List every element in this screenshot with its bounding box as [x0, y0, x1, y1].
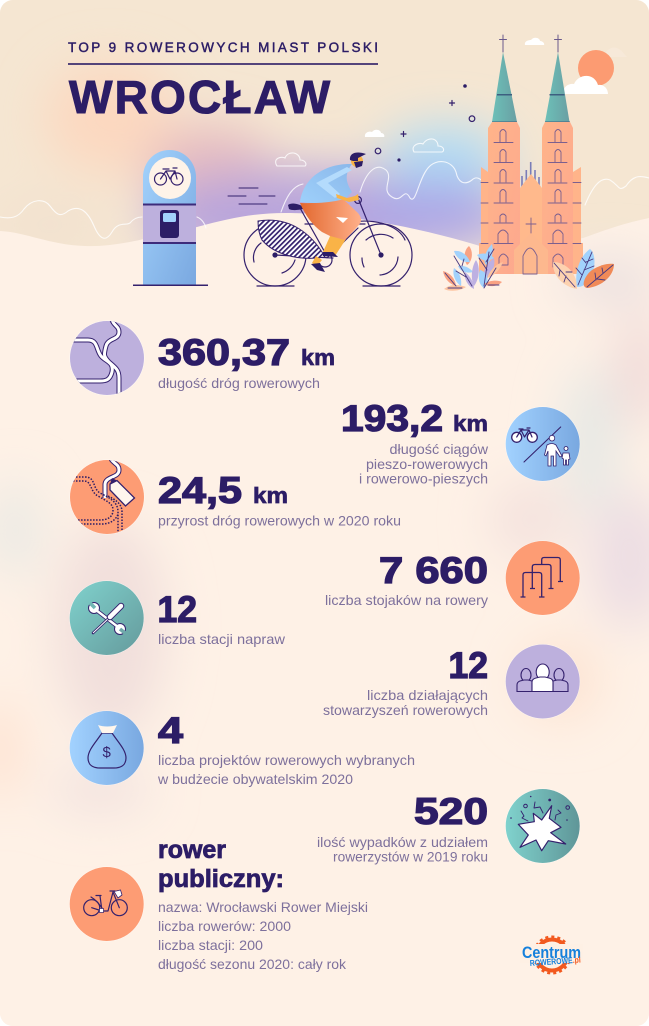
icon: bike and pedestrians	[505, 406, 580, 482]
value: 360,37	[158, 332, 290, 373]
value: km	[253, 483, 288, 508]
description: długość ciągów	[390, 441, 489, 457]
stat 7: civic budget projects	[69, 710, 415, 787]
description	[323, 687, 488, 718]
hand	[336, 194, 359, 202]
icon: money bag	[69, 710, 144, 786]
description: liczba stacji napraw	[158, 631, 286, 647]
cloud outline right	[413, 139, 444, 152]
plants right	[553, 249, 614, 289]
description: liczba projektów rowerowych wybranych	[158, 752, 415, 768]
description: długość dróg rowerowych	[158, 375, 320, 391]
description	[157, 752, 415, 787]
value	[158, 332, 335, 373]
sun	[602, 47, 627, 57]
bicycle wheels and frame	[244, 197, 412, 286]
icon: tools	[69, 580, 144, 656]
heading	[158, 836, 284, 893]
value: km	[453, 411, 488, 436]
description: przyrost dróg rowerowych w 2020 roku	[158, 512, 401, 528]
windows and ledges	[481, 130, 581, 274]
saddle	[288, 204, 305, 210]
title: city name: WROCŁAW	[69, 71, 331, 123]
description	[317, 834, 488, 864]
value	[158, 470, 288, 511]
description: i rowerowo-pieszych	[359, 470, 488, 486]
head	[351, 155, 363, 167]
stat 4: bike racks	[325, 540, 580, 616]
hatched leaf basket	[258, 220, 325, 258]
towers	[488, 122, 520, 274]
details: liczba stacji: 200	[158, 937, 263, 953]
icon: city bike	[69, 866, 144, 942]
portal	[514, 233, 548, 274]
description: rowerzystów w 2019 roku	[333, 848, 488, 864]
cloud outline left	[276, 153, 306, 166]
icon: roads	[68, 320, 144, 398]
description: liczba stojaków na rowery	[325, 592, 488, 608]
icon: collision burst	[505, 788, 580, 864]
legs	[323, 234, 346, 256]
description: pieszo-rowerowych	[366, 456, 488, 472]
value: 7 660	[379, 550, 488, 591]
sparkles	[463, 84, 467, 88]
public bike section	[69, 836, 368, 972]
stat 3: road growth	[70, 459, 401, 536]
value	[341, 398, 488, 439]
heading: publiczny:	[158, 865, 284, 893]
spires	[492, 52, 517, 122]
white clouds	[365, 130, 384, 137]
wrench	[88, 602, 126, 634]
details: nazwa: Wrocławski Rower Miejski	[158, 899, 368, 915]
value: 24,5	[158, 470, 242, 511]
icon: money bag: $	[103, 744, 112, 761]
title kicker: TOP 9 ROWEROWYCH MIAST POLSKI	[68, 40, 378, 55]
cathedral	[479, 35, 583, 274]
stat 6: associations	[323, 644, 580, 719]
value: 520	[414, 791, 488, 832]
ground hill	[0, 213, 649, 298]
decorative sky elements	[0, 38, 649, 238]
value: km	[301, 345, 335, 370]
cyclist	[244, 152, 412, 286]
details: liczba rowerów: 2000	[158, 918, 291, 934]
torso	[300, 164, 352, 203]
heading: rower	[158, 836, 226, 864]
description: liczba działających	[367, 687, 488, 703]
icon: racks	[505, 540, 580, 616]
description: w budżecie obywatelskim 2020	[157, 771, 353, 787]
icon: group of people	[505, 644, 580, 719]
value: 4	[158, 710, 184, 751]
speed lines	[228, 188, 275, 204]
plants left	[443, 244, 503, 291]
bike rental station	[133, 150, 208, 286]
stat 2: pedestrian-bike paths	[341, 398, 580, 486]
value: 12	[448, 645, 488, 686]
stat 1: road length	[68, 320, 335, 398]
crosses	[500, 35, 562, 52]
icon: road painting	[70, 459, 144, 536]
logo: Centrum Rowerowe: ROWEROWE.pl	[529, 954, 581, 968]
details: długość sezonu 2020: cały rok	[158, 956, 347, 972]
description: stowarzyszeń rowerowych	[323, 702, 488, 718]
nave and aisles	[479, 167, 583, 274]
logo: Centrum Rowerowe	[520, 937, 583, 973]
value: 193,2	[341, 398, 443, 439]
stat 5: repair stations	[69, 580, 286, 656]
organ spikes	[522, 162, 539, 193]
description	[359, 441, 489, 486]
details	[158, 899, 368, 972]
stat 8: accidents	[317, 788, 580, 864]
value: 12	[158, 589, 197, 630]
screwdriver	[93, 606, 121, 633]
description: ilość wypadków z udziałem	[317, 834, 488, 850]
logo: Centrum Rowerowe: Centrum	[522, 943, 581, 962]
